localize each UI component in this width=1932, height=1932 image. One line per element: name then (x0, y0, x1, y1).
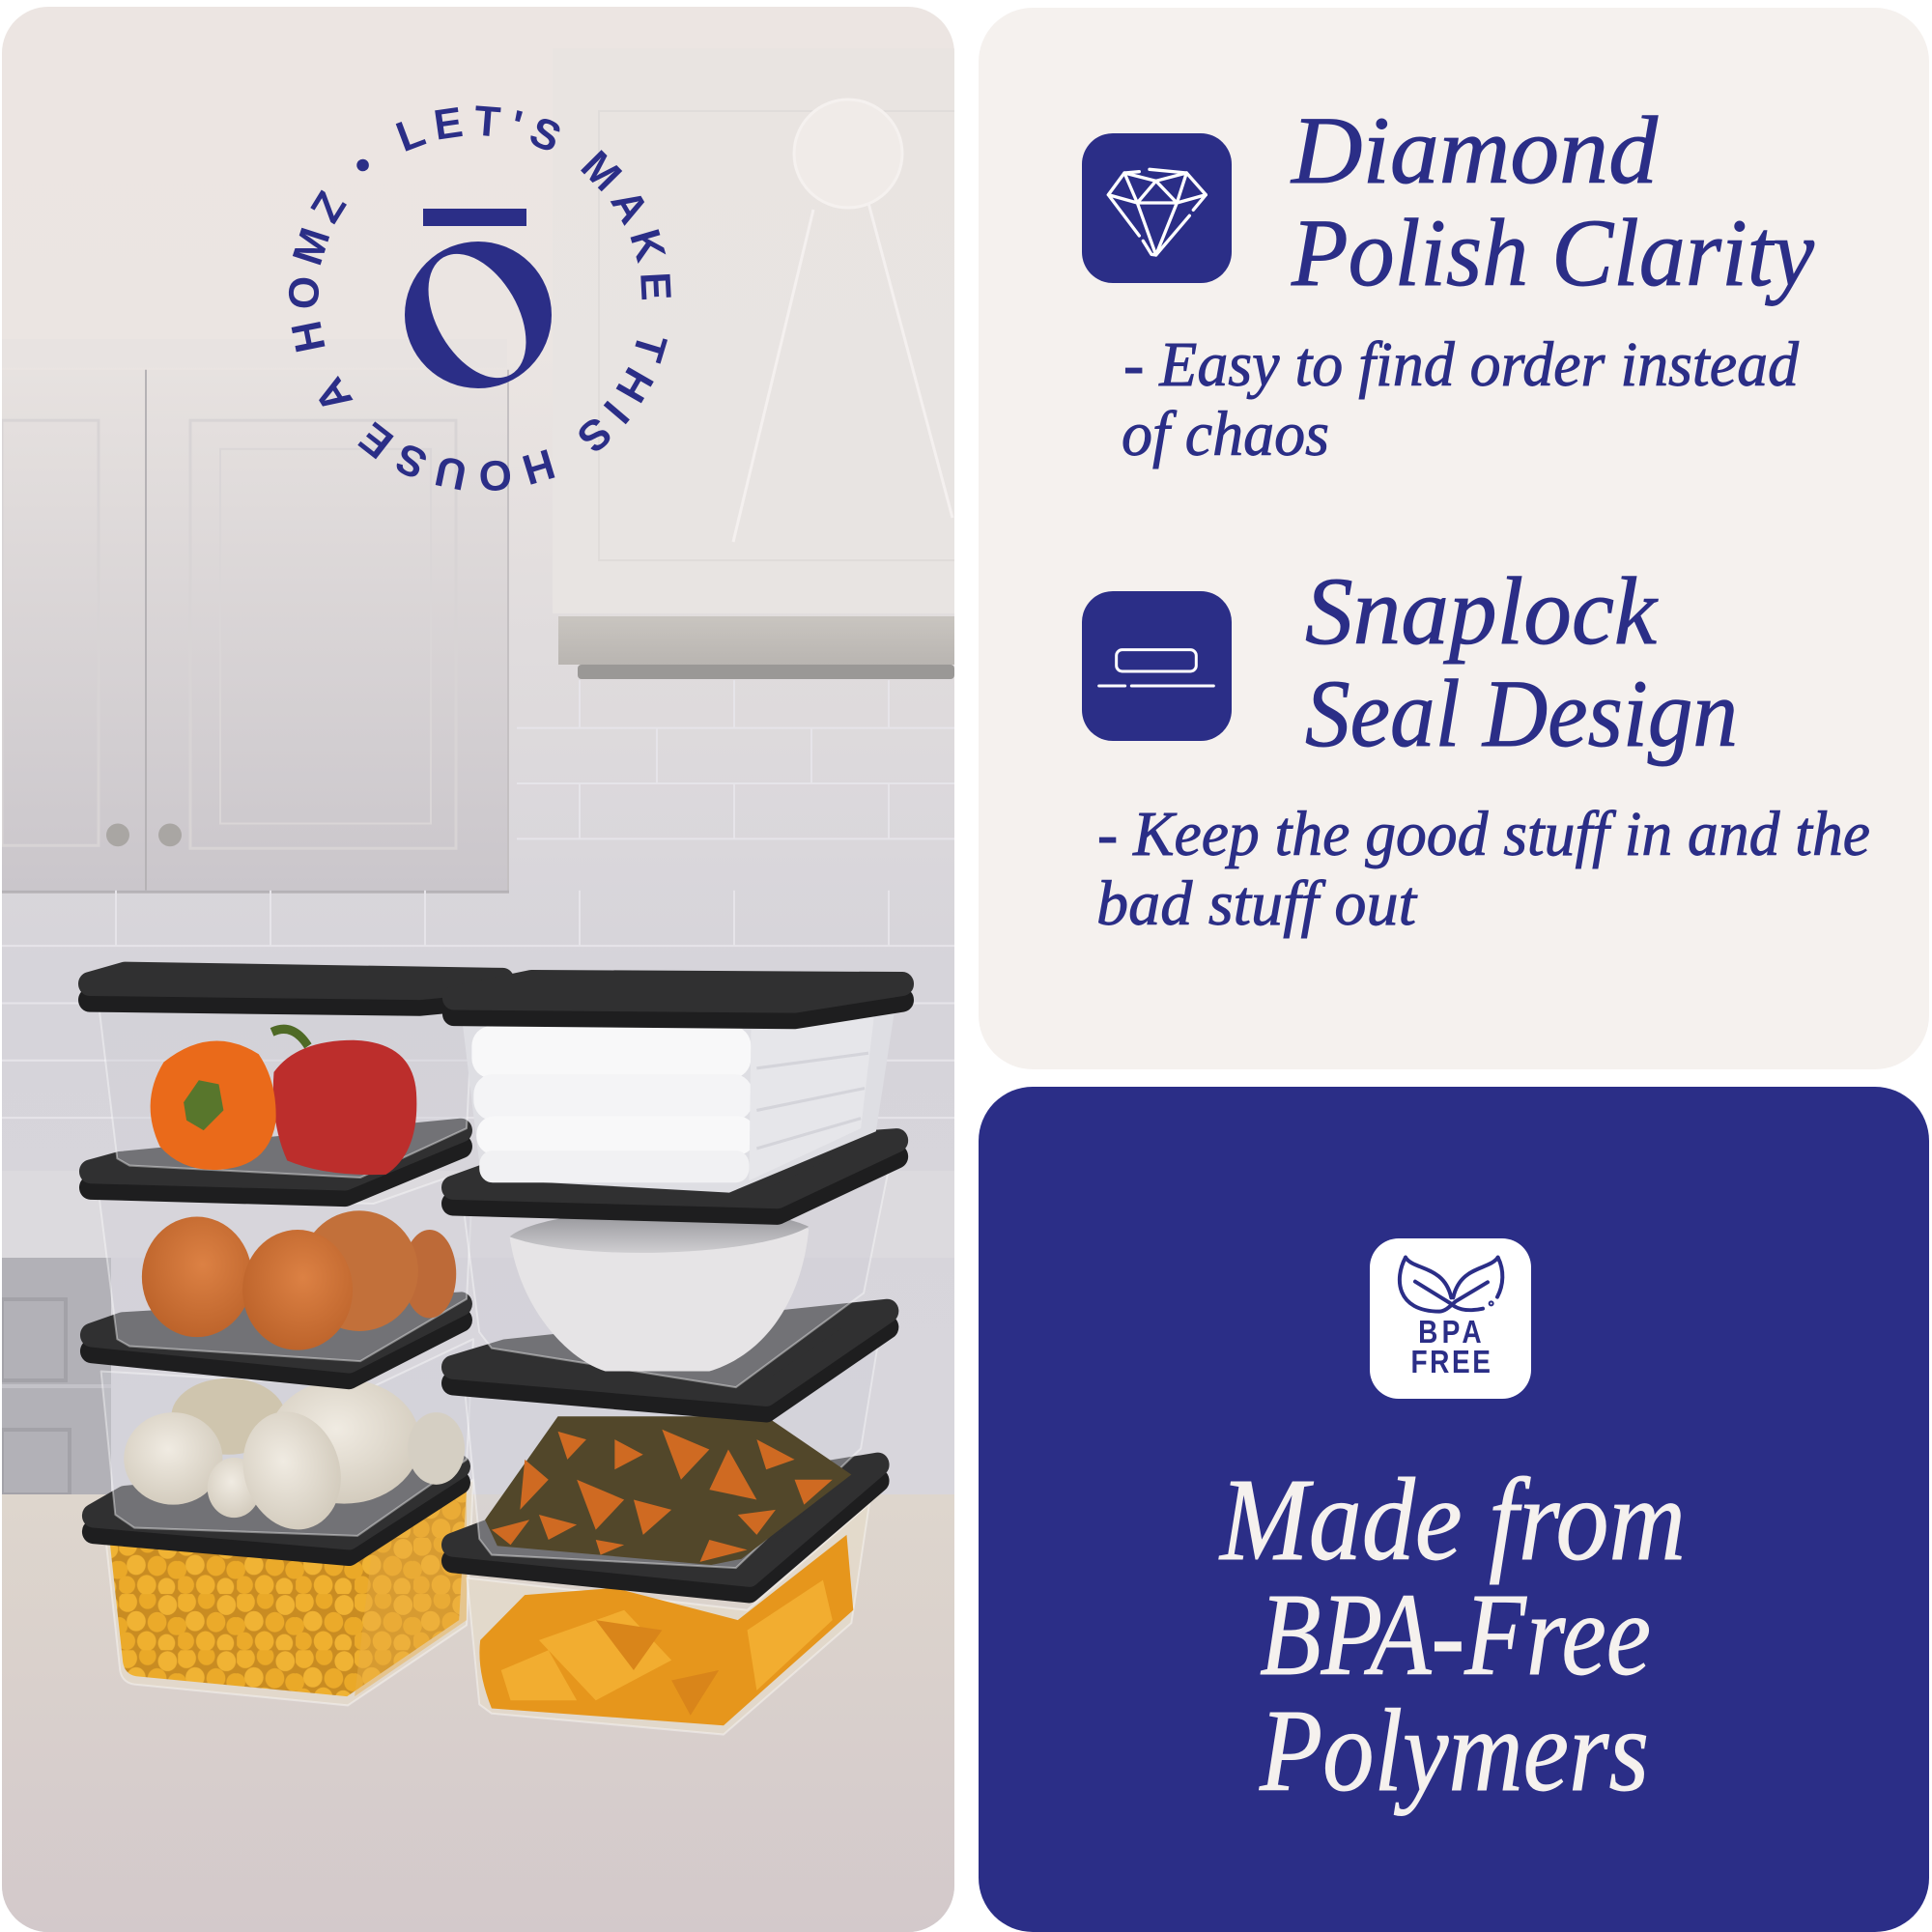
range hood (558, 99, 954, 679)
text: easy to find order: of chaos (1122, 399, 1329, 469)
heading: Diamond Polish Clarity (1290, 97, 1815, 306)
text: easy to find order: - Easy to find order instead (1123, 329, 1800, 400)
icon: BPA free badge: BPA (1418, 1315, 1486, 1350)
container: white bowl (453, 1141, 896, 1387)
countertop (2, 1494, 954, 1932)
icon: BPA free badge (1370, 1238, 1531, 1399)
heading: Made from BPA-Free Polymers: Made from (1218, 1455, 1686, 1585)
panel: BPA free (979, 1087, 1929, 1932)
logo mark: macron over O (405, 209, 552, 388)
right container stack (453, 981, 902, 1735)
logo: circular tagline badge (288, 105, 671, 491)
text: keep the good stuff: bad stuff out (1096, 868, 1418, 939)
container: garlic (92, 1304, 473, 1546)
panel: product features (979, 8, 1929, 1069)
heading: Diamond Polish Clarity: Polish Clarity (1291, 199, 1815, 306)
icon: diamond (1082, 133, 1232, 283)
heading: Snaplock Seal Design: Snaplock (1305, 557, 1659, 665)
container: orange dried food (453, 1464, 878, 1735)
heading: Diamond Polish Clarity: Diamond (1290, 97, 1659, 204)
text: keep the good stuff (1096, 799, 1870, 939)
heading: Made from BPA-Free Polymers: Polymers (1259, 1686, 1649, 1816)
icon: BPA free badge: FREE (1411, 1345, 1492, 1380)
container: bell peppers (90, 974, 502, 1178)
upper cabinets (2, 339, 509, 894)
lower cabinet and counter background (2, 1258, 111, 1494)
heading: Snaplock Seal Design (1305, 557, 1738, 767)
text: keep the good stuff: - Keep the good stuff in and the (1097, 799, 1870, 869)
text: easy to find order (1122, 329, 1800, 469)
heading: Made from BPA-Free Polymers (1218, 1455, 1686, 1816)
heading: Snaplock Seal Design: Seal Design (1305, 660, 1738, 767)
container: white folded towels (454, 981, 902, 1193)
heading: Made from BPA-Free Polymers: BPA-Free (1260, 1570, 1651, 1700)
subway tile wall (2, 680, 954, 1118)
panel: kitchen photo with stacked containers (2, 7, 954, 1932)
container: dried herbs and petals (453, 1311, 888, 1568)
left container stack (90, 974, 502, 1705)
container: yellow chickpeas (94, 1466, 473, 1705)
icon: snaplock seal (1082, 591, 1232, 741)
circular text: LET'S MAKE THIS HOUSE A HOMZ • (288, 105, 671, 491)
container: onions (91, 1130, 473, 1361)
